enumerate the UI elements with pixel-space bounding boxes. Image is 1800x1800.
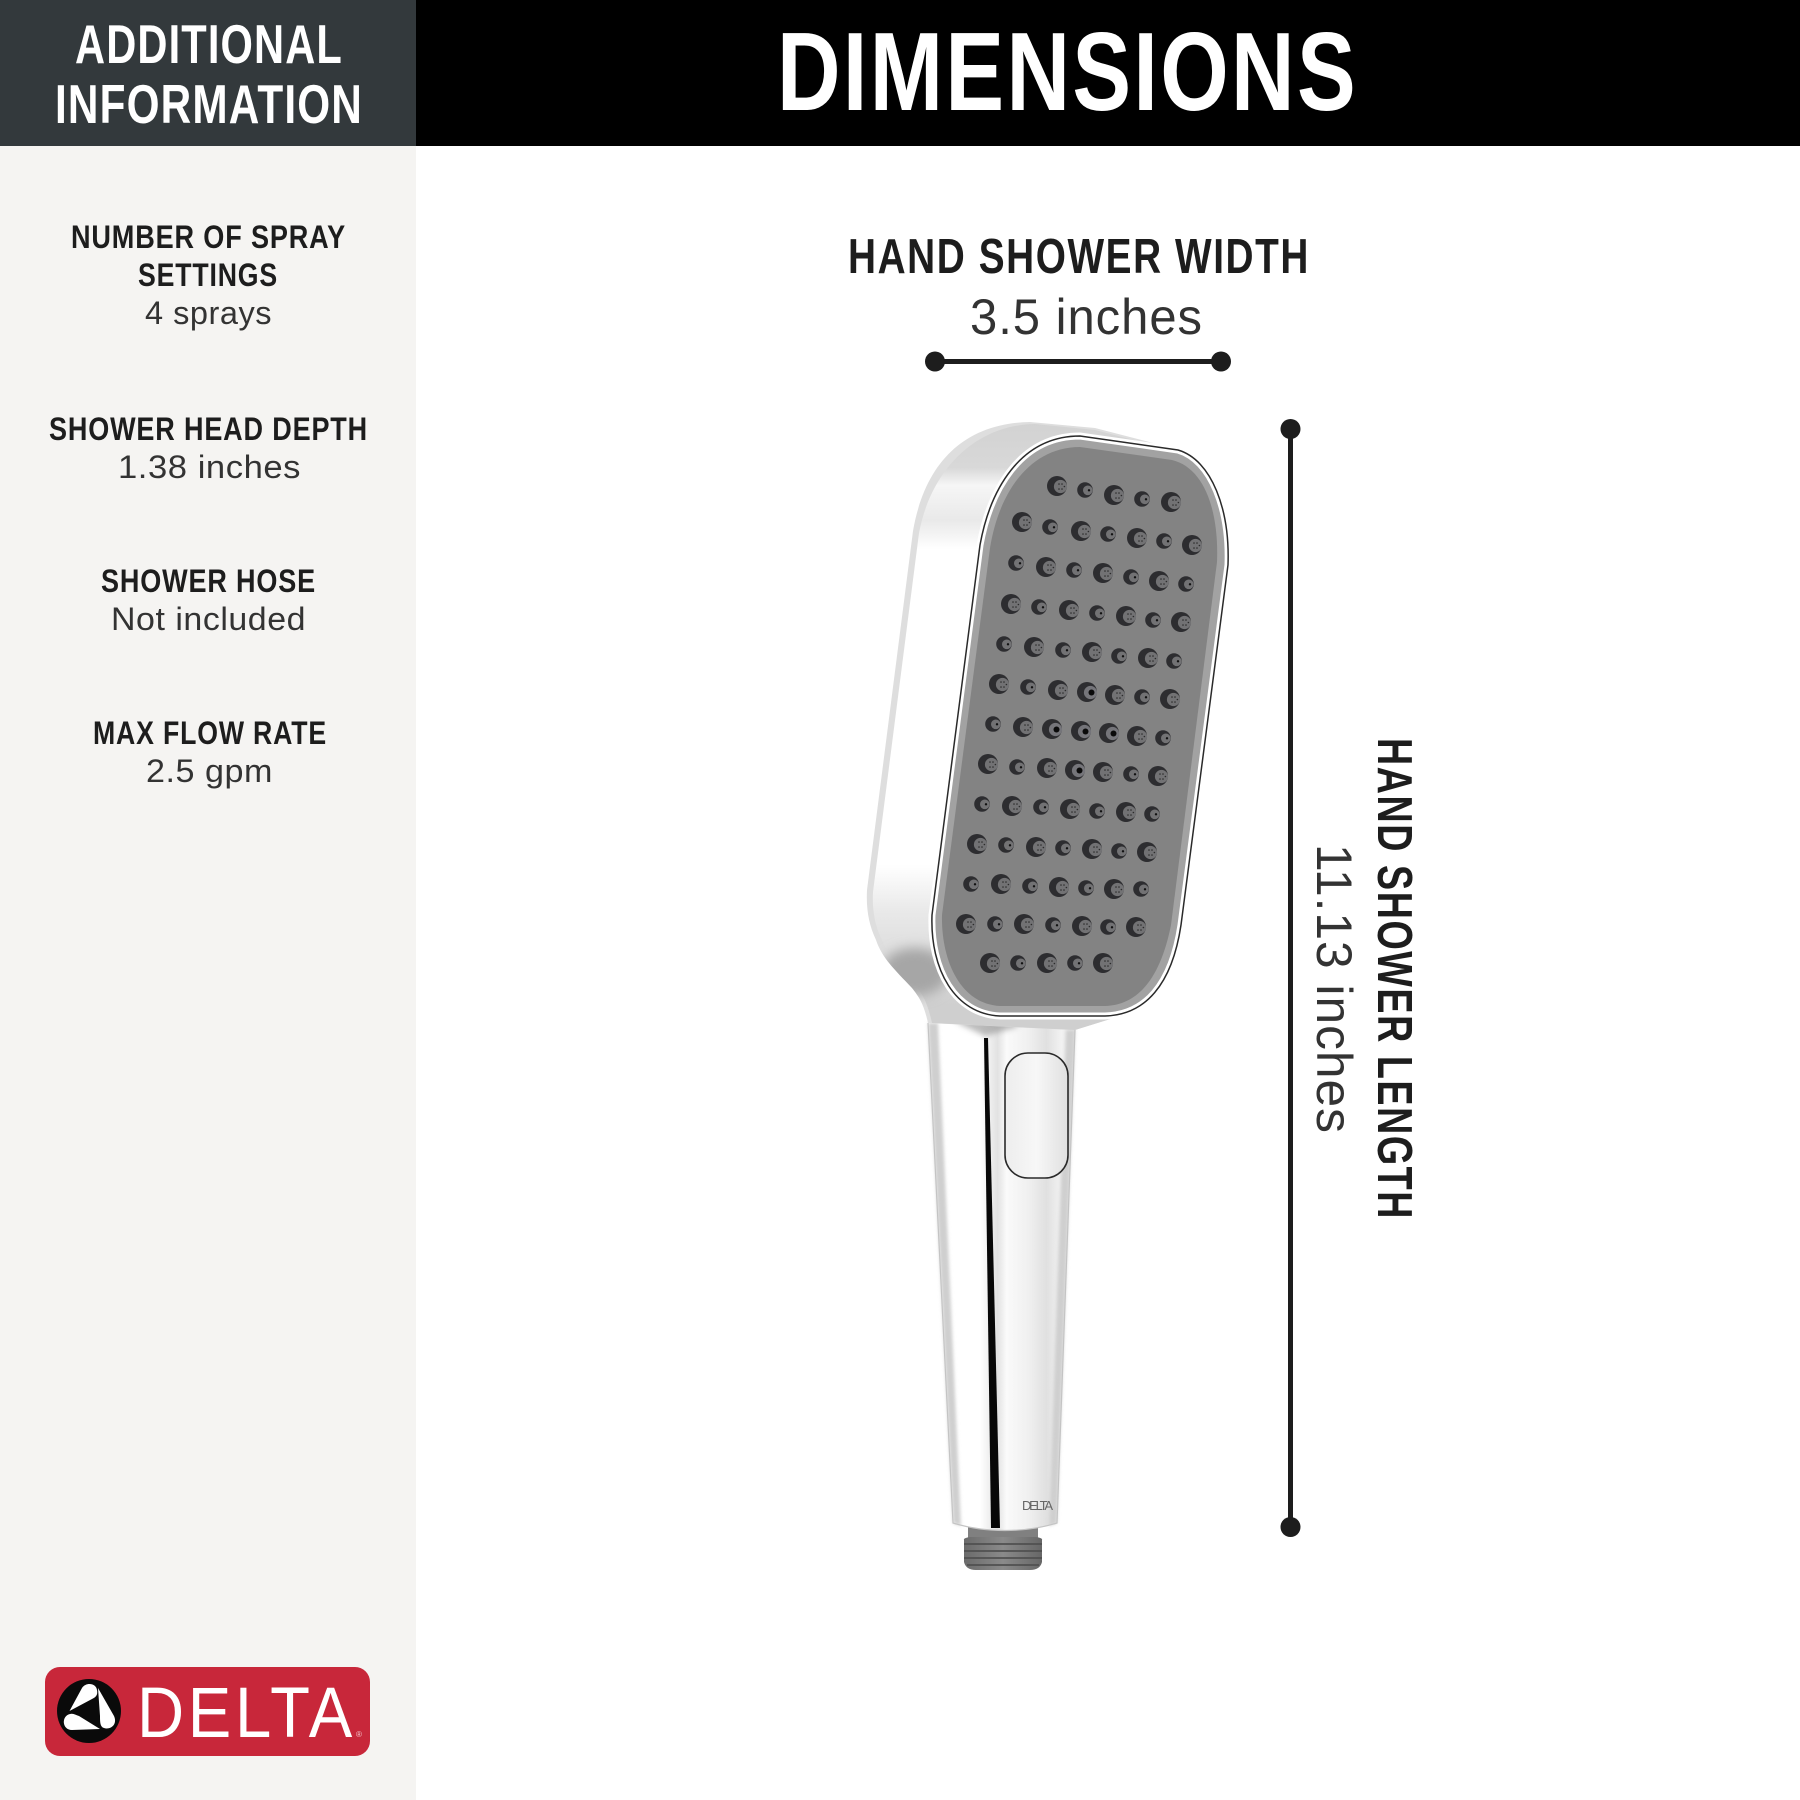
spec: number of spray settings: SETTINGS [138, 257, 278, 293]
spec: max flow rate [93, 715, 327, 789]
spec: shower head depth: 1.38 inches [118, 449, 301, 485]
product: hand shower [867, 422, 1228, 1570]
title bar: dimensions [416, 0, 1800, 146]
engraved logo: DELTA [1022, 1498, 1053, 1513]
heading: additional information: ADDITIONAL [75, 13, 343, 75]
spray nozzles [956, 476, 1202, 973]
mode button [1005, 1053, 1068, 1178]
hose connector thread [964, 1524, 1042, 1570]
panel: additional information sidebar [0, 0, 416, 1800]
dimension: hand shower length: 11.13 inches [1306, 844, 1362, 1134]
dimension: hand shower width: HAND SHOWER WIDTH [848, 230, 1310, 284]
spec: max flow rate: 2.5 gpm [146, 753, 273, 789]
dimension: hand shower length [1280, 419, 1421, 1537]
spec: number of spray settings: 4 sprays [145, 295, 272, 331]
spec: shower head depth [49, 411, 368, 485]
spec: number of spray settings [71, 219, 346, 331]
handle [925, 1000, 1110, 1530]
logo: delta: ® [356, 1730, 362, 1739]
shower head body [867, 422, 1180, 1030]
spec: max flow rate: MAX FLOW RATE [93, 715, 327, 751]
spec: shower hose: SHOWER HOSE [101, 563, 316, 599]
spec: shower hose: Not included [111, 601, 306, 637]
dimension: hand shower length: HAND SHOWER LENGTH [1367, 738, 1421, 1220]
dimension: hand shower width: 3.5 inches [970, 289, 1203, 345]
heading: additional information [0, 0, 416, 146]
spray face [932, 436, 1228, 1016]
logo: delta: DELTA [137, 1674, 356, 1753]
spec: shower head depth: SHOWER HEAD DEPTH [49, 411, 368, 447]
dimension: hand shower width [848, 230, 1310, 372]
spec: shower hose [101, 563, 316, 637]
heading: additional information: INFORMATION [55, 73, 363, 135]
spec: number of spray settings: NUMBER OF SPRAY [71, 219, 346, 255]
logo: delta [45, 1667, 370, 1756]
title bar: dimensions: DIMENSIONS [777, 10, 1358, 134]
